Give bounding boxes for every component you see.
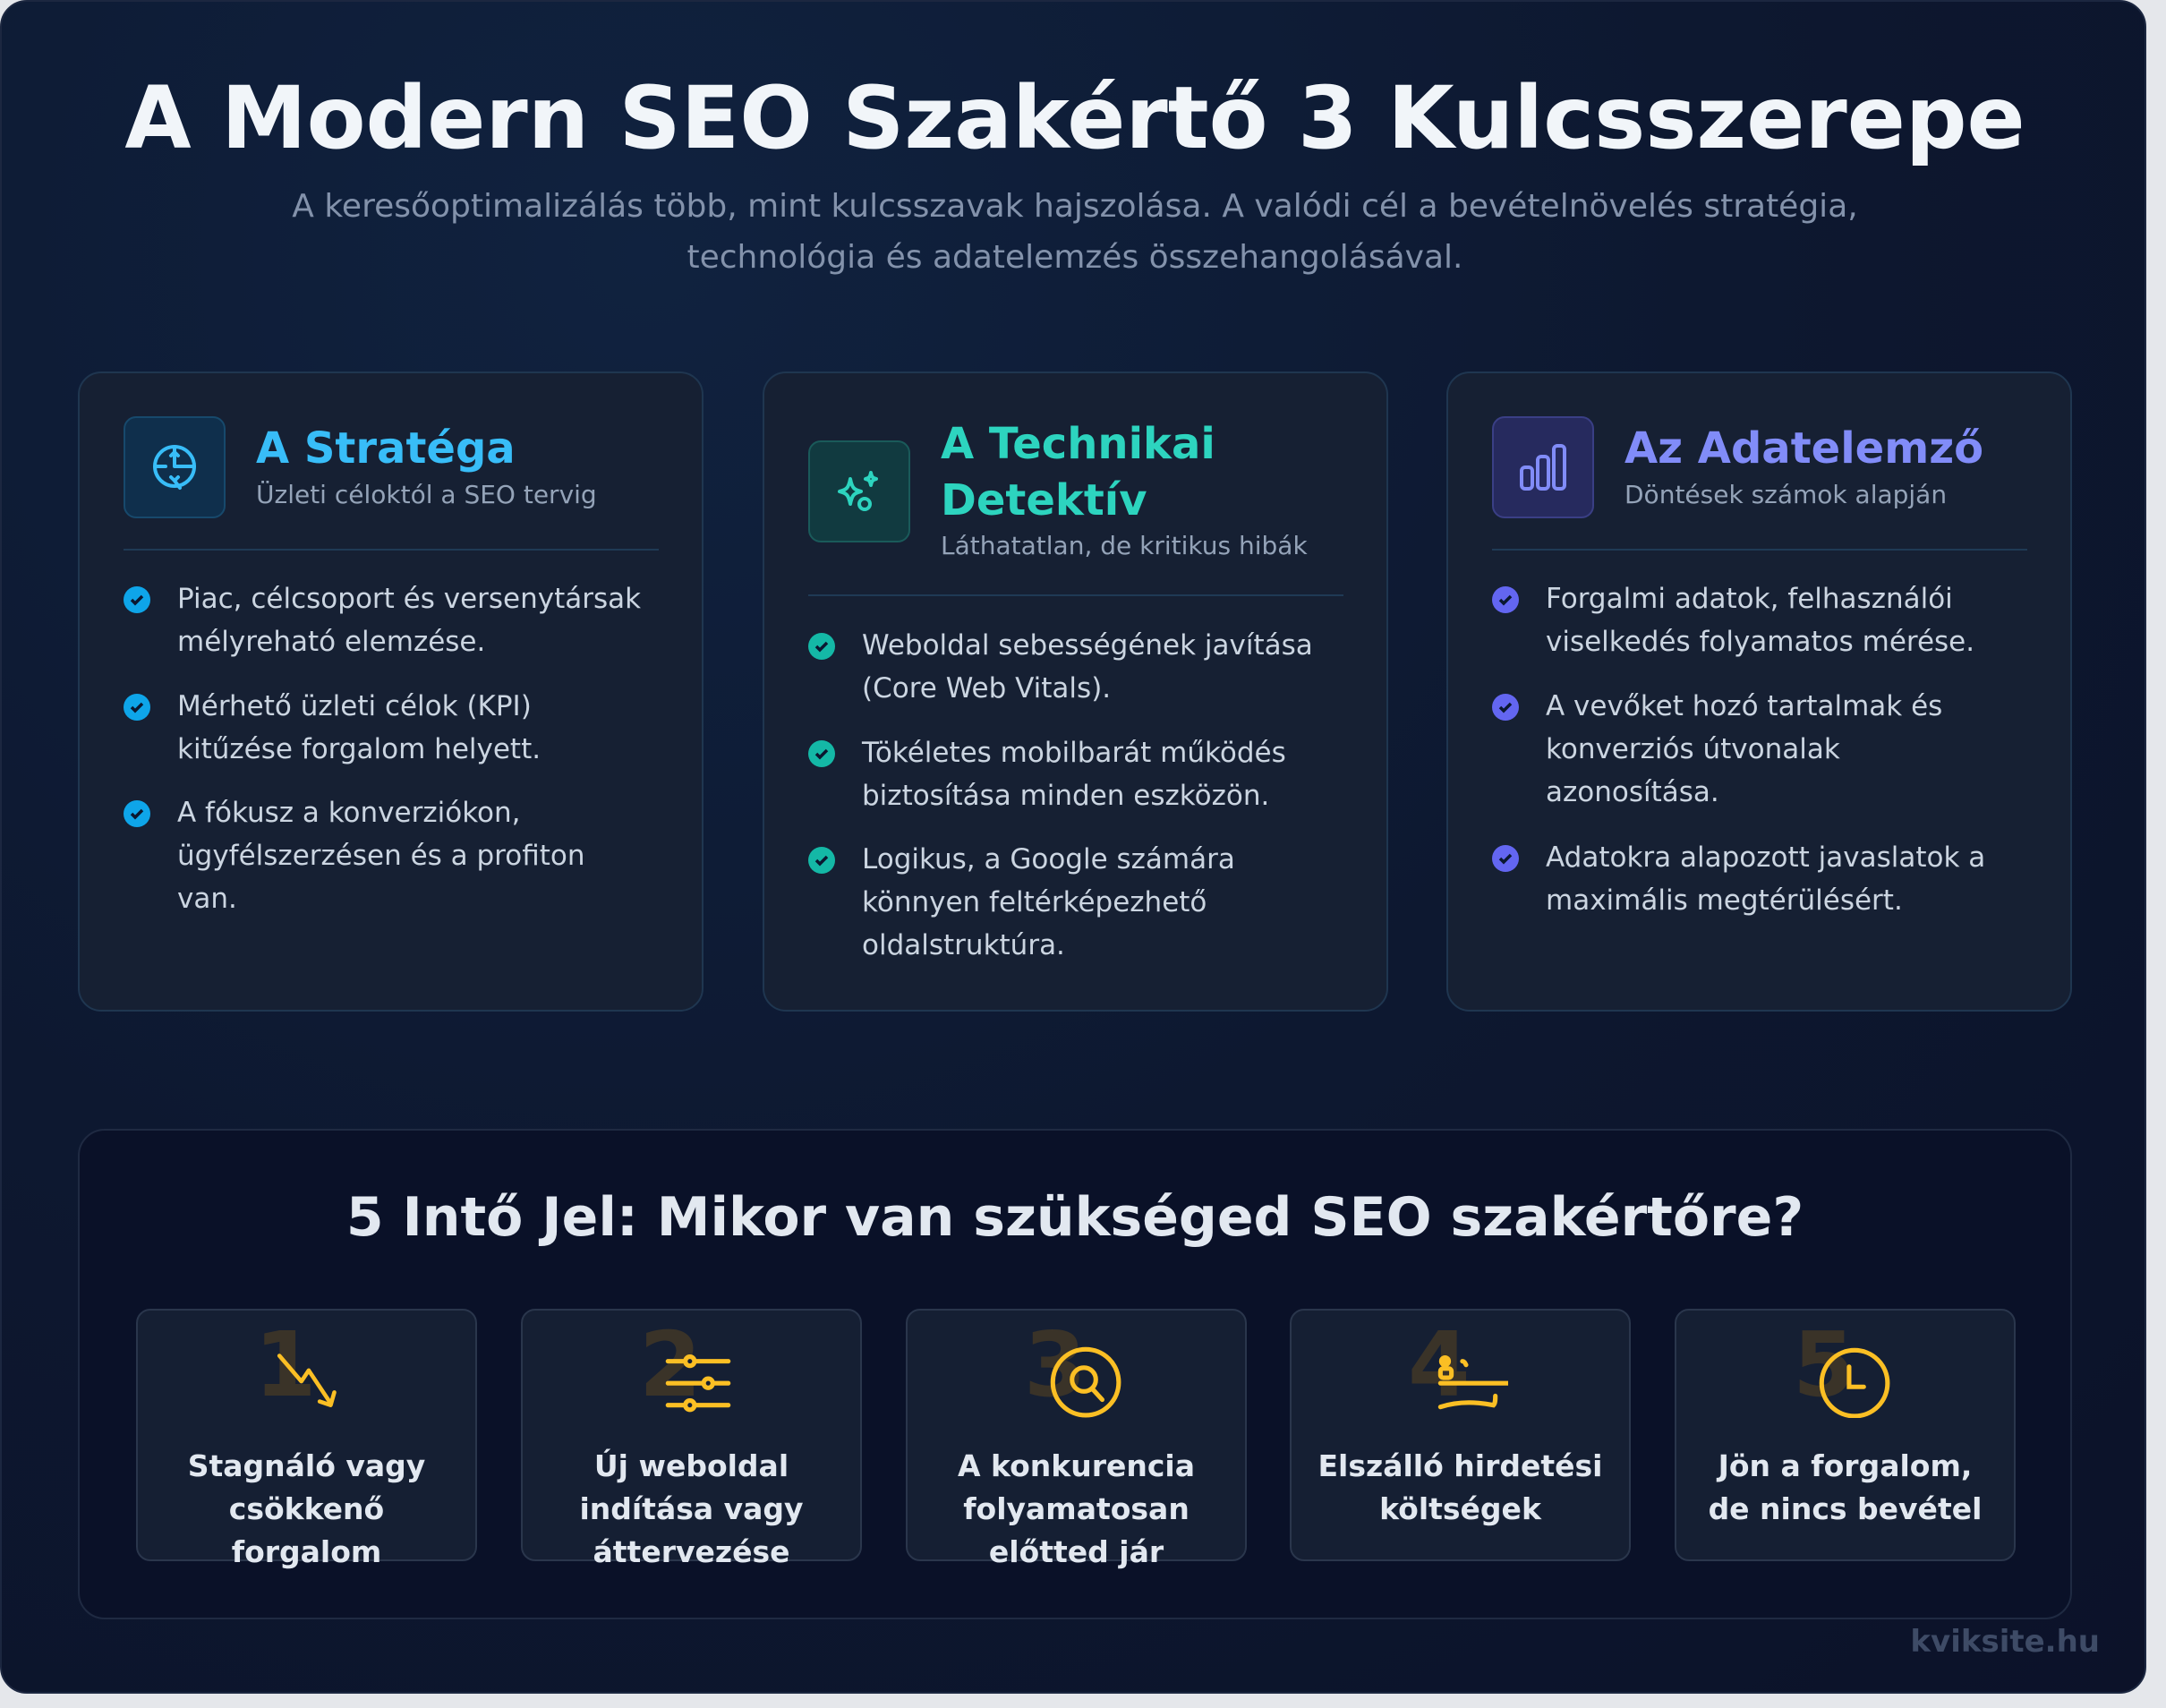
sign 2: áttervezése <box>593 1534 789 1569</box>
panel: technical: Logikus, a Google számára <box>862 843 1235 875</box>
sign 2: Új weboldal <box>594 1448 789 1483</box>
panel: technical: könnyen feltérképezhető <box>862 886 1207 918</box>
bullet list <box>124 583 641 915</box>
subtitle <box>292 188 1858 276</box>
panel: technical: oldalstruktúra. <box>862 929 1065 961</box>
icon: money <box>1437 1355 1508 1409</box>
panel: technical: Tökéletes mobilbarát működés <box>862 737 1286 769</box>
panel: technical: Weboldal sebességének javítása <box>862 629 1313 662</box>
icon: sparkles <box>808 440 910 542</box>
sign 3: folyamatosan <box>963 1491 1190 1526</box>
sign 4: Elszálló hirdetési <box>1318 1448 1602 1483</box>
sign 3: 3 <box>1024 1312 1087 1417</box>
sign 1: Stagnáló vagy <box>188 1448 425 1483</box>
sign 5: de nincs bevétel <box>1709 1491 1982 1526</box>
panel: analyst: viselkedés folyamatos mérése. <box>1546 626 1974 658</box>
bullet list <box>808 629 1313 961</box>
panel: strategy: Piac, célcsoport és versenytársak <box>177 583 641 615</box>
title: A Modern SEO Szakértő 3 Kulcsszerepe <box>124 68 2025 168</box>
panel: strategy: A fókusz a konverziókon, <box>177 797 521 829</box>
panel: technical: biztosítása minden eszközön. <box>862 780 1269 812</box>
panel: strategy <box>78 371 704 1012</box>
sign 5: 5 <box>1793 1312 1855 1417</box>
sign 4 <box>1290 1309 1631 1561</box>
panel: analyst: konverziós útvonalak <box>1546 733 1840 765</box>
sign 1: csökkenő <box>229 1491 384 1526</box>
sign 2: indítása vagy <box>579 1491 804 1526</box>
watermark: kviksite.hu <box>1910 1624 2100 1660</box>
sign 1: 1 <box>254 1312 317 1417</box>
icon: sliders <box>666 1354 730 1413</box>
sign 5 <box>1675 1309 2016 1561</box>
sign 4: 4 <box>1408 1312 1471 1417</box>
subheading: Láthatatlan, de kritikus hibák <box>941 531 1308 560</box>
icon: search <box>1051 1346 1121 1418</box>
panel: analyst: maximális megtérülésért. <box>1546 884 1903 917</box>
sign 3: A konkurencia <box>958 1448 1195 1483</box>
panel: strategy: kitűzése forgalom helyett. <box>177 733 541 765</box>
sign 5: Jön a forgalom, <box>1718 1448 1972 1483</box>
subtitle: A keresőoptimalizálás több, mint kulcsszavak hajszolása. A valódi cél a bevételnövelés stratégia, <box>292 188 1858 225</box>
panel: warning signs <box>78 1129 2072 1619</box>
sign 4: költségek <box>1379 1491 1541 1526</box>
sign 1 <box>136 1309 477 1561</box>
heading: Detektív <box>941 475 1147 525</box>
sign 3: előtted jár <box>989 1534 1164 1569</box>
panel: technical <box>763 371 1388 1012</box>
panel: analyst: Adatokra alapozott javaslatok a <box>1546 841 1985 874</box>
panel: analyst <box>1446 371 2072 1012</box>
sign 3 <box>906 1309 1247 1561</box>
panel: strategy: mélyreható elemzése. <box>177 626 485 658</box>
icon: compass <box>124 416 226 518</box>
panel: analyst: Forgalmi adatok, felhasználói <box>1546 583 1953 615</box>
panel: strategy: van. <box>177 883 237 915</box>
sign 2: 2 <box>639 1312 702 1417</box>
heading: Az Adatelemző <box>1624 423 1983 474</box>
subtitle: technológia és adatelemzés összehangolásával. <box>687 239 1462 276</box>
sign 1: forgalom <box>232 1534 381 1569</box>
heading: A Technikai <box>941 419 1215 469</box>
panel: analyst: A vevőket hozó tartalmak és <box>1546 690 1942 722</box>
heading <box>941 419 1215 525</box>
sign 2 <box>521 1309 862 1561</box>
icon: trend down <box>277 1354 337 1407</box>
subheading: Üzleti céloktól a SEO tervig <box>256 480 597 509</box>
heading: A Stratéga <box>256 423 516 474</box>
icon: clock <box>1819 1348 1890 1418</box>
icon: bar chart <box>1492 416 1594 518</box>
subheading: Döntések számok alapján <box>1624 480 1947 509</box>
panel: strategy: Mérhető üzleti célok (KPI) <box>177 690 532 722</box>
bullet list <box>1492 583 1985 917</box>
panel: technical: (Core Web Vitals). <box>862 672 1111 705</box>
panel: analyst: azonosítása. <box>1546 776 1719 808</box>
heading: 5 Intő Jel: Mikor van szükséged SEO szakértőre? <box>346 1186 1804 1249</box>
panel: strategy: ügyfélszerzésen és a profiton <box>177 840 585 872</box>
